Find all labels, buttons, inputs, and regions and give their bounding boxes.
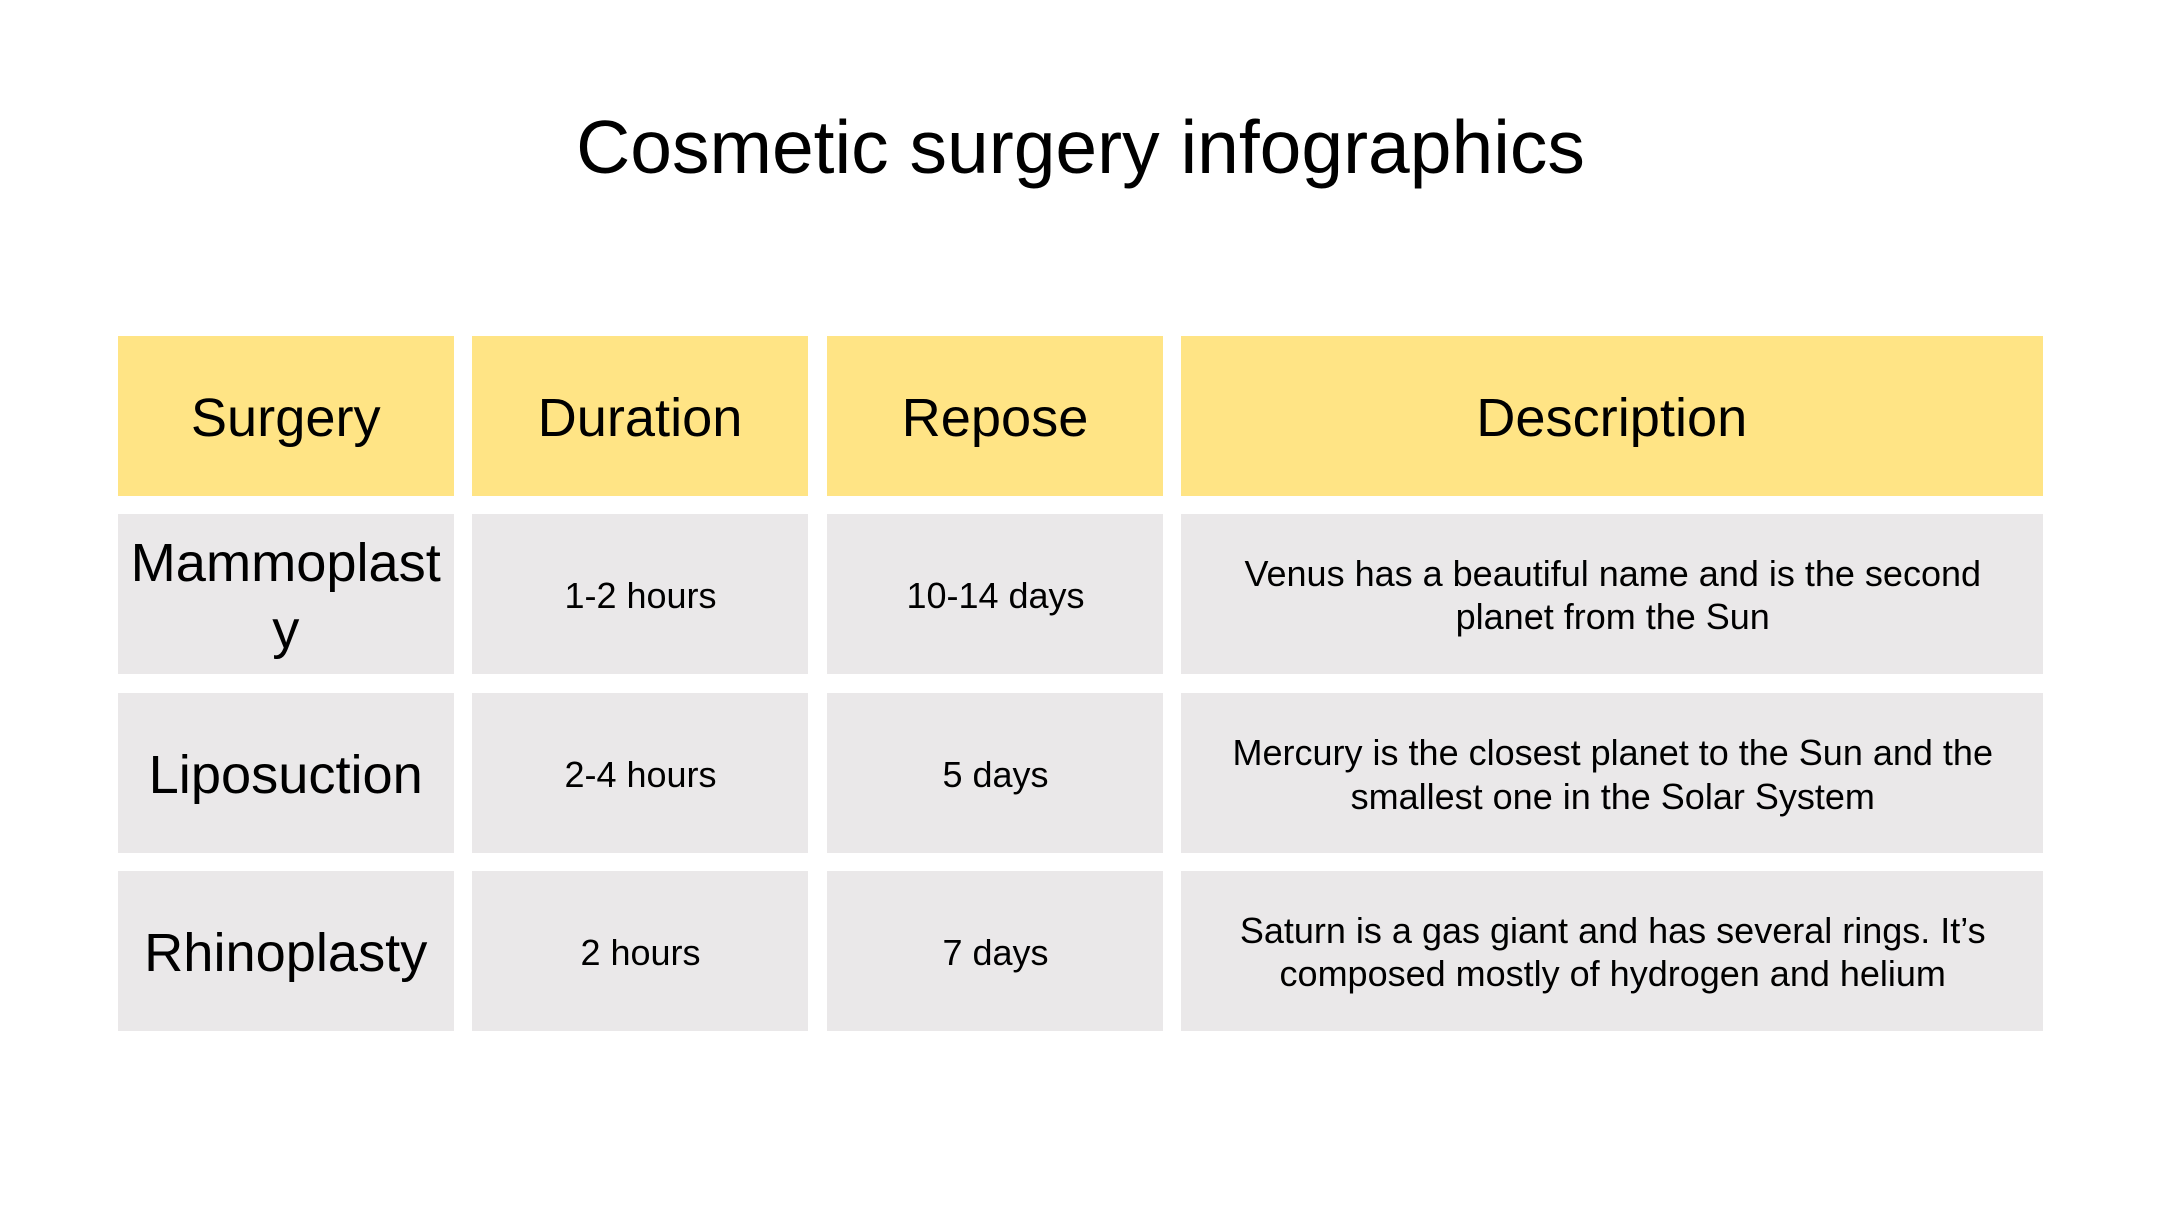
row 1 description [1181, 514, 2042, 674]
row 2 duration: 2-4 hours [564, 754, 717, 795]
column heading: Surgery [118, 336, 454, 496]
row 2 description: smallest one in the Solar System [1351, 776, 1875, 816]
row 3 repose [827, 870, 1163, 1030]
row 3 description: Saturn is a gas giant and has several rings. It’s [1240, 910, 1986, 951]
row 1 surgery name: Mammoplasty: y [272, 600, 299, 660]
column heading: Duration: Duration [538, 388, 742, 448]
row 2 repose [827, 692, 1163, 852]
row 3 duration: 2 hours [580, 932, 701, 973]
row 2 surgery name: Liposuction [118, 692, 454, 852]
row 3 description [1181, 870, 2042, 1030]
row 1 duration [472, 514, 808, 674]
table: cosmetic surgeries [118, 336, 2043, 1031]
column heading: Surgery: Surgery [191, 388, 381, 448]
row 2 description: Mercury is the closest planet to the Sun and the [1233, 732, 1993, 773]
row 1 surgery name: Mammoplasty: Mammoplast [131, 533, 441, 593]
column heading: Description [1181, 336, 2042, 496]
row 3 surgery name: Rhinoplasty [118, 870, 454, 1030]
row 1 repose [827, 514, 1163, 674]
row 3 repose: 7 days [942, 932, 1049, 973]
row 1 duration: 1-2 hours [564, 575, 717, 616]
row 1 repose: 10-14 days [906, 575, 1085, 616]
row 2 duration [472, 692, 808, 852]
row 1 surgery name: Mammoplasty [118, 514, 454, 674]
row 3 surgery name: Rhinoplasty: Rhinoplasty [144, 923, 427, 983]
column heading: Repose: Repose [902, 388, 1088, 448]
row 1 description: planet from the Sun [1456, 596, 1770, 637]
row 3 description: composed mostly of hydrogen and helium [1280, 953, 1946, 994]
row 1 description: Venus has a beautiful name and is the second [1244, 553, 1981, 594]
row 3 duration [472, 870, 808, 1030]
column heading: Description: Description [1476, 388, 1747, 448]
column heading: Repose [827, 336, 1163, 496]
row 2 description [1181, 692, 2042, 852]
row 2 surgery name: Liposuction: Liposuction [149, 745, 423, 805]
row 2 repose: 5 days [942, 754, 1049, 795]
column heading: Duration [472, 336, 808, 496]
title: Cosmetic surgery infographics [576, 105, 1585, 189]
